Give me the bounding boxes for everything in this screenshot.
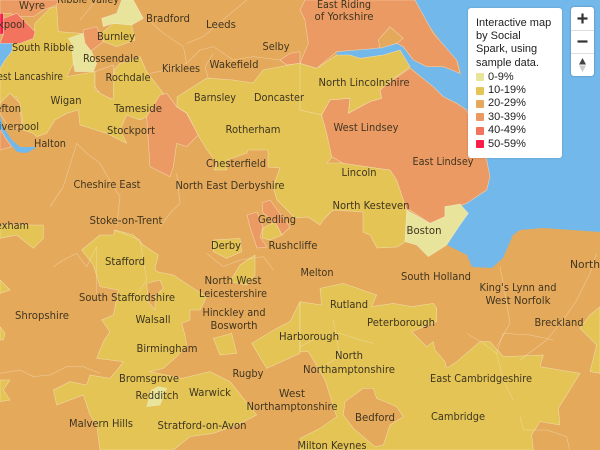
labels: Cheshire, Derbyshire and Nottinghamshire: North East Derbyshire — [176, 179, 285, 192]
district: Lancashire and Wigan, 10-19% — [0, 7, 163, 143]
labels: Leicestershire and Northamptonshire: Bosworth — [210, 319, 258, 332]
district: Broxtowe patch, 10-19% — [262, 222, 282, 240]
labels: Yorkshire: Selby — [262, 40, 290, 53]
legend title — [476, 16, 551, 69]
labels: Lincolnshire: West Lindsey — [334, 121, 399, 134]
labels: Leicestershire and Northamptonshire: Harborough — [279, 330, 339, 343]
district: Erewash, 30-39% — [247, 212, 267, 248]
labels: West Midlands: Birmingham — [136, 342, 198, 355]
labels: East of England: Bedford — [355, 411, 395, 424]
legend — [468, 8, 562, 158]
labels: East of England: East Cambridgeshire — [430, 372, 532, 385]
labels: Leicestershire and Northamptonshire — [199, 266, 395, 450]
district: Redditch, 0-9% — [147, 387, 167, 407]
labels: Yorkshire: Doncaster — [254, 91, 304, 104]
district: Hinckley east, 10-19% — [213, 333, 237, 355]
district: Powys edge south, 10-19% — [0, 380, 10, 402]
legend item: 10-19%: 10-19% — [488, 84, 526, 96]
labels: Cheshire, Derbyshire and Nottinghamshire: Derby — [211, 239, 241, 252]
labels: Yorkshire — [146, 0, 374, 136]
region group: east midlands and east anglia districts — [300, 283, 600, 450]
labels: Lancashire and Greater Manchester: Wigan — [50, 94, 82, 107]
labels: West Midlands: Bromsgrove — [119, 372, 179, 385]
district: Wrexham, 10-19% — [0, 225, 43, 248]
region group: Barnsley to North Kesteven — [177, 63, 407, 248]
labels: Lancashire and Greater Manchester: Rochdale — [106, 71, 151, 84]
district: East Riding of Yorkshire, 30-39% — [300, 0, 460, 73]
district: Pendle, 30-39% — [83, 27, 103, 52]
labels: Lincolnshire: South Holland — [401, 270, 471, 283]
labels: West Midlands: Warwick — [189, 386, 232, 399]
labels: Leicestershire and Northamptonshire: Rugby — [232, 367, 264, 380]
labels: Leicestershire and Northamptonshire: Northamptonshire — [246, 400, 338, 413]
icon: zoom out — [578, 40, 588, 43]
labels: West Midlands: Walsall — [136, 313, 170, 326]
labels: Leicestershire and Northamptonshire: North — [335, 349, 363, 362]
labels: West Midlands: Shropshire — [15, 309, 69, 322]
district: Bedford, 20-29% — [343, 388, 403, 447]
district: Blackburn, 0-9% — [68, 33, 97, 72]
district: Powys edge north, 10-19% — [0, 280, 10, 293]
labels: East of England: Cambridge — [431, 410, 485, 423]
district: North Lincolnshire, 10-19% — [300, 50, 410, 115]
district: West and East Lindsey, 30-39% — [322, 68, 490, 223]
district: Boston, 0-9% — [405, 204, 468, 257]
labels: West Midlands: Stafford — [105, 255, 145, 268]
district: Mid Suffolk, 10-19% — [580, 307, 600, 373]
labels: Leicestershire and Northamptonshire: Hinckley and — [202, 306, 266, 319]
labels: Leicestershire and Northamptonshire: Northamptonshire — [303, 363, 395, 376]
icon: zoom in — [578, 14, 588, 24]
district block: Stafford to Stratford, 10-19% — [53, 230, 257, 450]
labels: West Midlands: Malvern Hills — [69, 417, 133, 430]
labels: Cheshire, Derbyshire and Nottinghamshire: Cheshire East — [74, 178, 141, 191]
control icons — [578, 14, 588, 72]
labels: Cheshire, Derbyshire and Nottinghamshire: Stoke-on-Trent — [90, 214, 163, 227]
labels: West Midlands: South Staffordshire — [79, 291, 175, 304]
district block: Rutland to Cambridge, 10-19% — [300, 283, 580, 450]
district: Derby, 10-19% — [213, 238, 242, 258]
labels: East of England — [355, 258, 600, 424]
region group: east coast districts — [300, 0, 490, 257]
district: Rochdale, 20-29% — [95, 65, 113, 98]
region group: west midlands districts — [0, 225, 300, 450]
labels: East of England: North — [570, 258, 600, 271]
region group: north-west districts — [0, 0, 300, 177]
labels: Leicestershire and Northamptonshire: Leicestershire — [199, 287, 267, 300]
labels: Cheshire, Derbyshire and Nottinghamshire: Rushcliffe — [268, 239, 318, 252]
district: Selby east, 30-39% — [280, 52, 300, 65]
zoom controls — [571, 7, 594, 76]
labels: Yorkshire: Rotherham — [226, 123, 280, 136]
labels: Leicestershire and Northamptonshire: West — [279, 387, 306, 400]
labels: Lincolnshire: Lincoln — [342, 166, 377, 179]
district: Fylde, 40-49% — [0, 13, 35, 43]
district: Craven, 0-9% — [102, 0, 143, 27]
district: Burnley, 10-19% — [102, 23, 135, 47]
labels: Leicestershire and Northamptonshire: Rutland — [330, 298, 368, 311]
labels: Lancashire and Greater Manchester: Burnley — [97, 30, 135, 43]
district: High Peak, 30-39% — [147, 93, 198, 177]
labels: East of England: West Norfolk — [486, 294, 551, 307]
labels: West Midlands: Stratford-on-Avon — [158, 419, 247, 432]
legend title: by Social — [476, 30, 521, 42]
labels: Lancashire and Greater Manchester: Stockport — [107, 124, 156, 137]
district: Hull, 20-29% — [378, 27, 403, 48]
labels: Lincolnshire: North Kesteven — [332, 199, 410, 212]
legend item: 0-9%: 0-9% — [488, 70, 514, 82]
labels: Lancashire and Greater Manchester — [0, 0, 162, 150]
labels: Yorkshire: of Yorkshire — [314, 10, 374, 23]
labels: Lincolnshire — [318, 76, 474, 283]
district: Gedling east, 30-39% — [262, 200, 290, 235]
legend title: Interactive map — [476, 16, 551, 28]
labels: Yorkshire: Bradford — [146, 12, 190, 25]
west estuaries — [0, 43, 37, 153]
district: Blackpool, 50-59% — [0, 13, 3, 35]
labels: Yorkshire: Kirklees — [162, 62, 200, 75]
labels: Yorkshire: Barnsley — [194, 91, 236, 104]
labels: Lancashire and Greater Manchester: Rossendale — [83, 52, 139, 65]
labels: West Midlands — [15, 255, 247, 432]
district: Powys edge middle, 10-19% — [0, 327, 5, 340]
labels: Lincolnshire: North Lincolnshire — [318, 76, 410, 89]
labels: Lancashire and Greater Manchester: Halton — [34, 137, 66, 150]
legend title: Spark, using — [476, 43, 537, 55]
legend item: 0-9% — [476, 70, 514, 82]
legend item: 40-49%: 40-49% — [488, 124, 526, 136]
icon: compass — [579, 58, 586, 72]
district: Sefton, 20-29% — [0, 93, 22, 130]
legend item: 30-39%: 30-39% — [488, 111, 526, 123]
district: North West Leicestershire east, 10-19% — [230, 255, 255, 285]
labels: Cheshire, Derbyshire and Nottinghamshire — [0, 157, 318, 252]
labels: East of England: King's Lynn and — [480, 281, 556, 294]
district block: central 10-19% — [177, 63, 407, 248]
labels: Cheshire, Derbyshire and Nottinghamshire: Chesterfield — [206, 157, 266, 170]
district: Cannock Chase, 20-29% — [147, 280, 163, 310]
district: Wirral, 30-39% — [0, 128, 12, 150]
labels: Lincolnshire: East Lindsey — [412, 155, 474, 168]
labels: Yorkshire: Wakefield — [210, 58, 258, 71]
labels: East of England: Peterborough — [367, 316, 435, 329]
labels: Yorkshire: Leeds — [206, 18, 236, 31]
district: Wyre, 30-39% — [0, 0, 58, 17]
district: Harborough, 10-19% — [252, 302, 300, 368]
labels: Cheshire, Derbyshire and Nottinghamshire: Gedling — [258, 213, 296, 226]
labels: Lancashire and Greater Manchester: Tameside — [113, 102, 162, 115]
labels: Lancashire and Greater Manchester: South Ribble — [12, 41, 74, 54]
labels: Leicestershire and Northamptonshire: North West — [204, 274, 262, 287]
legend item: 20-29%: 20-29% — [488, 97, 526, 109]
labels: Leicestershire and Northamptonshire: Melton — [300, 266, 334, 279]
labels: East of England: Breckland — [534, 316, 584, 329]
labels: Lincolnshire: Boston — [406, 224, 442, 237]
legend item: 50-59%: 50-59% — [488, 138, 526, 150]
labels: West Midlands: Redditch — [136, 389, 179, 402]
legend title: sample data. — [476, 57, 539, 69]
